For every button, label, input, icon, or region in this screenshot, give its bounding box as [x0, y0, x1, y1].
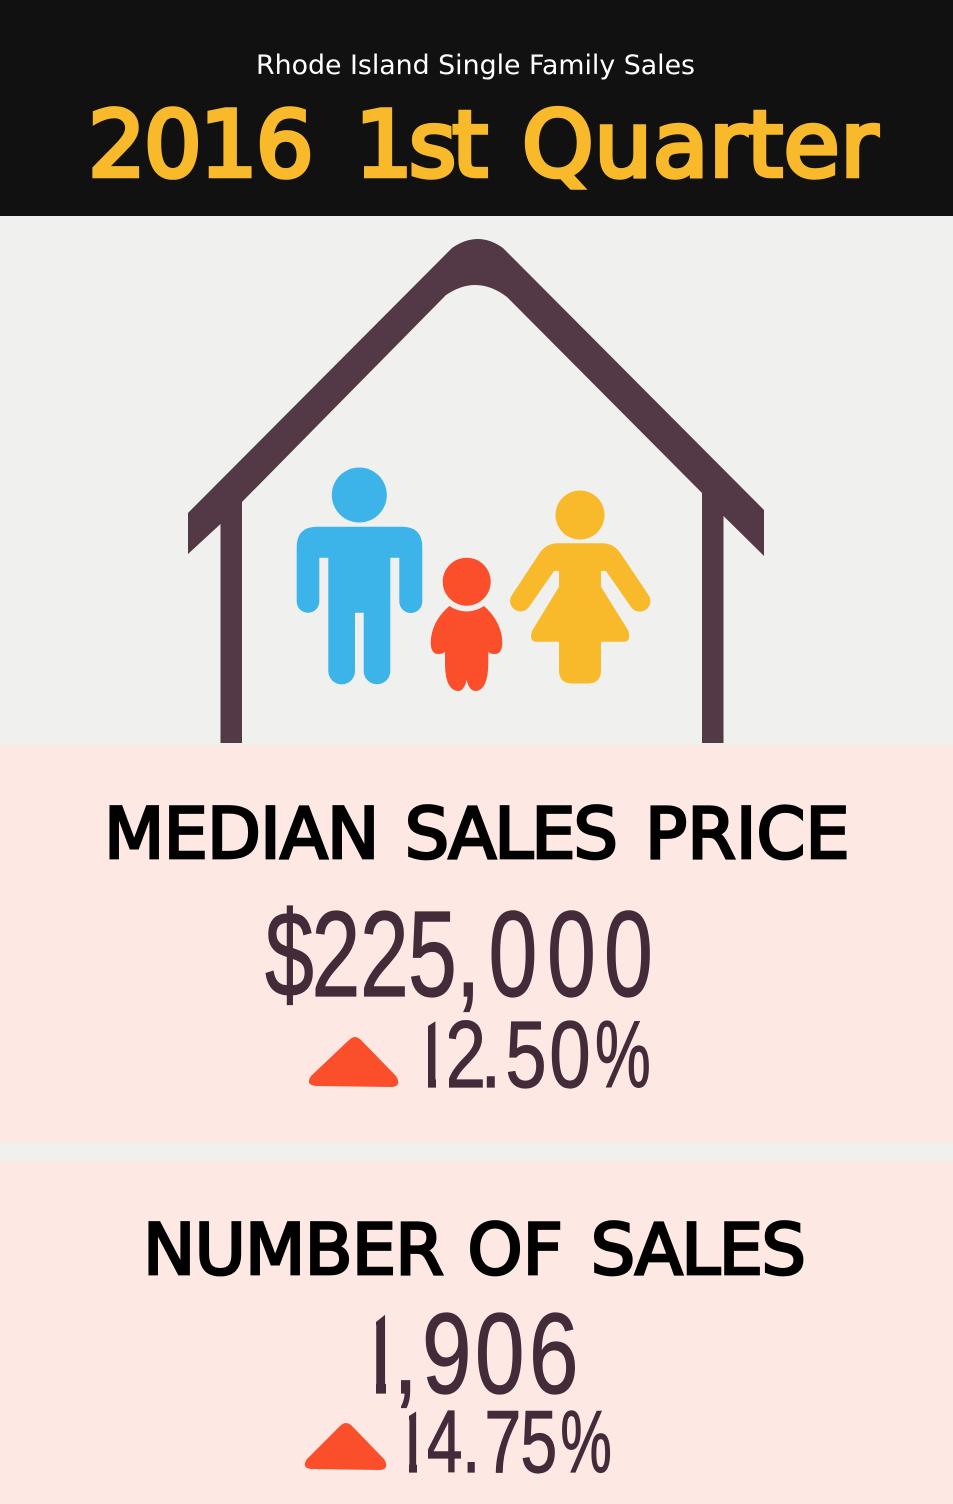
- change: %: [560, 1393, 612, 1491]
- heading: OF: [468, 1209, 563, 1291]
- value: 1,906: [354, 1289, 578, 1418]
- subtitle: Rhode Island Single Family Sales: [256, 50, 695, 81]
- change: [409, 1410, 610, 1474]
- heading: NUMBER: [143, 1209, 443, 1291]
- icon: house outline: [188, 239, 764, 743]
- heading: SALES: [405, 793, 616, 875]
- change: 14.75: [393, 1394, 557, 1491]
- icon: mother: [510, 490, 650, 684]
- header band: [0, 0, 953, 216]
- title: Quarter: [522, 93, 878, 198]
- change: [428, 1020, 649, 1089]
- value: $225,000: [265, 886, 653, 1022]
- icon: up arrow: [305, 1423, 386, 1470]
- change: %: [595, 1002, 651, 1108]
- heading: PRICE: [645, 793, 850, 875]
- heading: SALES: [591, 1209, 804, 1291]
- icon: father: [297, 468, 422, 684]
- panel: median sales price: [0, 745, 953, 1143]
- change: 12.50: [410, 1002, 591, 1108]
- heading: MEDIAN: [104, 793, 379, 875]
- title: 1st: [355, 93, 486, 198]
- title: 2016: [88, 93, 312, 198]
- icon: up arrow: [309, 1037, 398, 1087]
- icon: child: [431, 558, 502, 691]
- panel: number of sales: [0, 1161, 953, 1504]
